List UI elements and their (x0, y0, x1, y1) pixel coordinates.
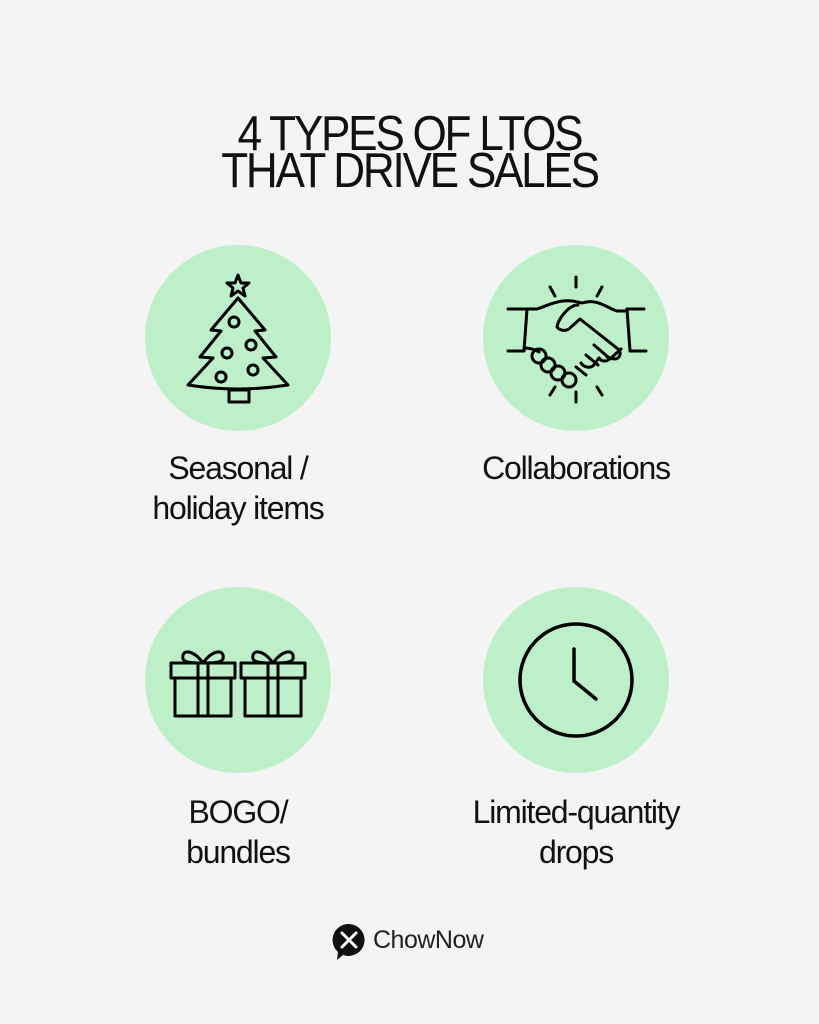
label: limited: Limited-quantity (473, 794, 679, 830)
label: bogo: bundles (186, 834, 290, 870)
label: seasonal: Seasonal / (168, 450, 308, 486)
label: limited: drops (539, 834, 613, 870)
label: collaborations: Collaborations (482, 450, 670, 486)
title: THAT DRIVE SALES (221, 144, 598, 198)
icon: handshake (483, 245, 669, 431)
icon: clock (483, 587, 669, 773)
label: limited (473, 794, 680, 870)
label: seasonal (152, 450, 324, 526)
label: bogo: BOGO/ (189, 794, 287, 830)
logo: ChowNow: ChowNow (373, 926, 483, 954)
label: bogo (186, 794, 290, 870)
label: seasonal: holiday items (152, 490, 324, 526)
icon: christmas tree (145, 245, 331, 431)
logo: ChowNow (332, 924, 484, 960)
icon: gifts (145, 587, 331, 773)
title (221, 107, 598, 198)
title: 4 TYPES OF LTOS (238, 107, 581, 161)
